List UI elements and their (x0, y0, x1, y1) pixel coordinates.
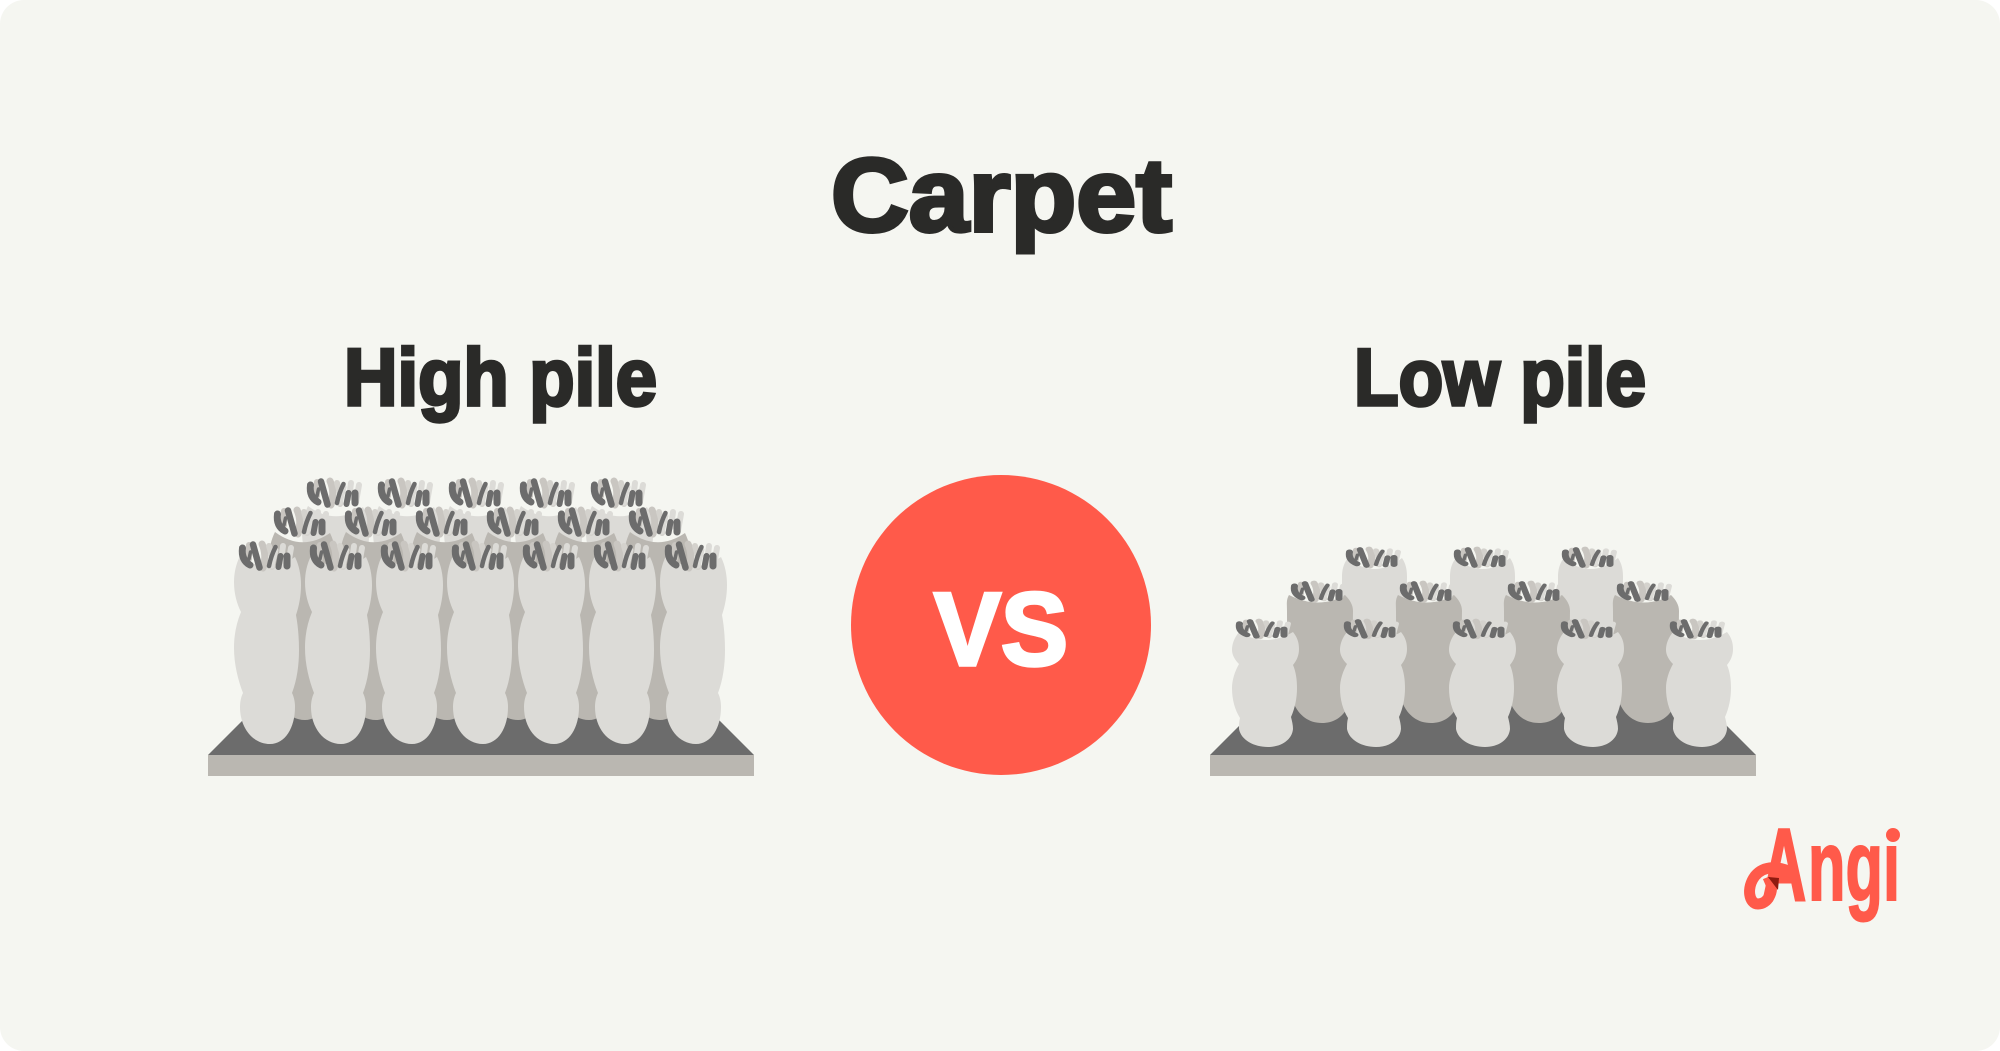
heading: high pile: High pile (344, 333, 657, 423)
carpet backing (1210, 690, 1756, 776)
heading: low pile: Low pile (1354, 333, 1646, 423)
logo: Angi: ngi (1808, 810, 1900, 922)
illustration: high pile carpet (208, 481, 754, 776)
front row of fibres (234, 544, 727, 744)
middle row of fibres (1287, 583, 1679, 723)
front row of fibres (1232, 621, 1733, 747)
VS badge: VS (934, 572, 1068, 688)
VS badge (851, 475, 1151, 775)
back row of fibres (302, 481, 653, 694)
logo: Angi (1744, 828, 1900, 922)
carpet backing (208, 680, 754, 776)
logo: Angi: A (1762, 808, 1806, 922)
back row of fibres (1342, 549, 1623, 700)
title: Carpet (831, 138, 1172, 254)
middle row of fibres (269, 510, 691, 720)
illustration: low pile carpet (1210, 549, 1756, 776)
